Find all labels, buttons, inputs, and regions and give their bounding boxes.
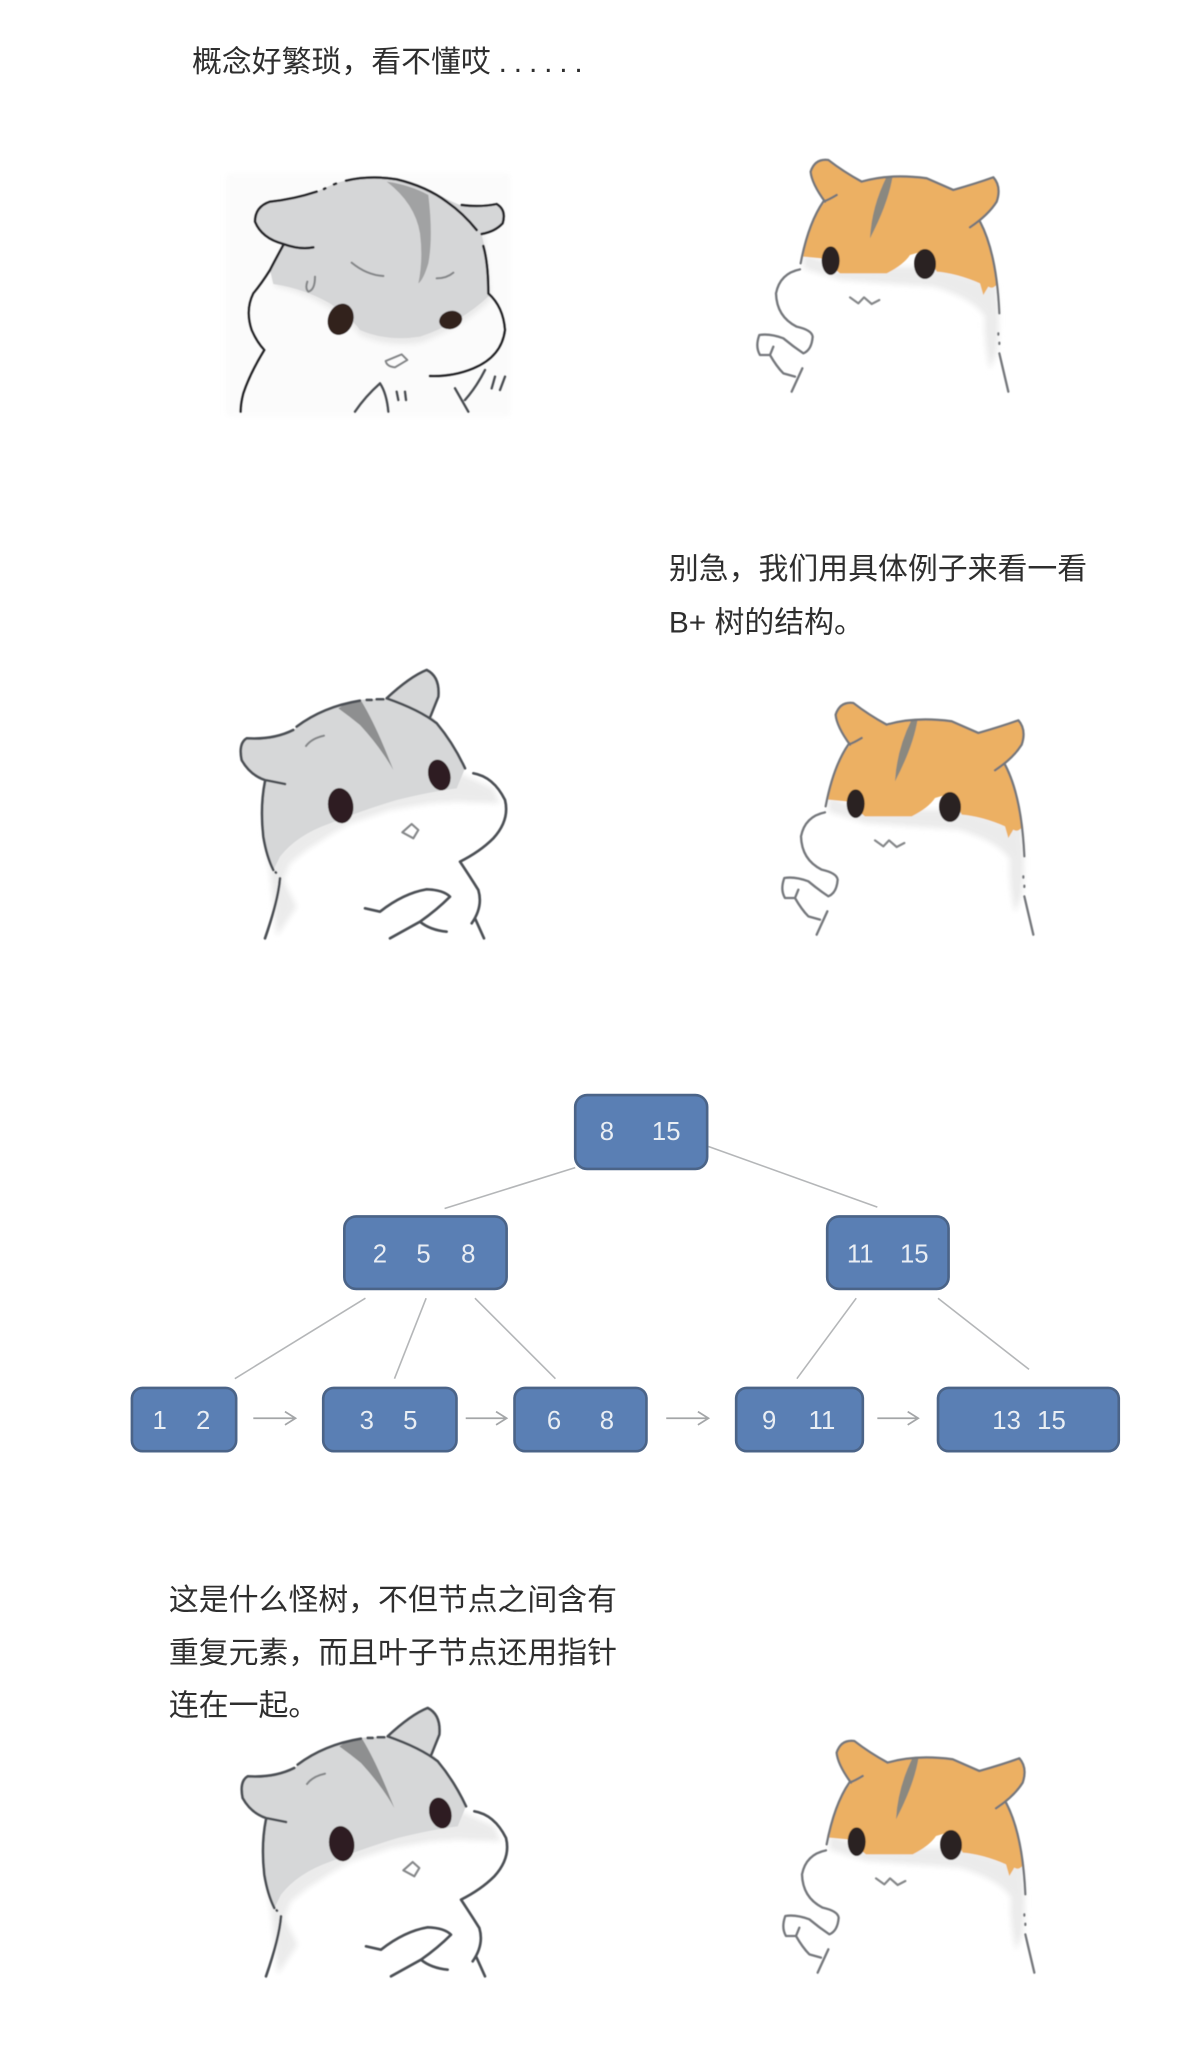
mouth xyxy=(386,354,407,367)
leaf node 6 8 xyxy=(515,1388,646,1451)
internal node 2 5 8: 2 xyxy=(373,1241,387,1269)
root node xyxy=(575,1095,707,1169)
text: explanation xyxy=(669,553,1087,640)
outline xyxy=(241,177,505,412)
internal node 2 5 8: 8 xyxy=(461,1241,476,1269)
mouth xyxy=(402,824,418,838)
hamster: gray looking up, middle xyxy=(241,670,506,938)
stripe xyxy=(387,182,431,283)
leaf node 3 5: 5 xyxy=(403,1407,417,1435)
leaf node 13 15: 15 xyxy=(1037,1407,1066,1435)
eyes xyxy=(822,246,936,279)
leaf link arrows xyxy=(253,1412,918,1425)
leaf node 9 11: 11 xyxy=(809,1407,835,1435)
eyes xyxy=(848,1827,962,1860)
hamster: orange listening, middle xyxy=(782,703,1033,935)
outline xyxy=(757,160,1008,392)
root node: 8 xyxy=(600,1118,614,1146)
leaf node 1 2 xyxy=(132,1388,236,1451)
eyes xyxy=(323,300,464,339)
outline xyxy=(241,670,506,938)
mouth xyxy=(876,1878,905,1885)
internal node 11 15: 15 xyxy=(900,1241,929,1269)
stripe xyxy=(870,176,893,238)
mouth xyxy=(850,297,879,304)
text: explanation: B+ 树的结构。 xyxy=(669,607,864,640)
outline xyxy=(783,1741,1034,1973)
root node: 15 xyxy=(652,1118,681,1146)
leaf node 13 15: 13 xyxy=(992,1407,1021,1435)
internal node 11 15 xyxy=(827,1216,949,1289)
B+ tree diagram xyxy=(132,1095,1119,1451)
leaf node 9 11: 9 xyxy=(762,1407,776,1435)
tree connector lines xyxy=(235,1146,1029,1379)
internal node 2 5 8: 5 xyxy=(416,1241,431,1269)
eyes xyxy=(326,757,454,825)
stripe xyxy=(896,1757,919,1819)
internal node 11 15: 11 xyxy=(847,1241,874,1269)
stripe xyxy=(339,1739,394,1808)
text: observation: 连在一起。 xyxy=(169,1690,318,1723)
outline xyxy=(782,703,1033,935)
eyes xyxy=(327,1795,455,1863)
text: explanation: 别急，我们用具体例子来看一看 xyxy=(669,553,1087,586)
mouth xyxy=(875,840,904,847)
hamster: orange listening, bottom xyxy=(783,1741,1034,1973)
mouth xyxy=(403,1862,419,1876)
stripe xyxy=(338,701,393,770)
paws xyxy=(355,370,505,412)
text: observation: 这是什么怪树，不但节点之间含有 xyxy=(169,1584,617,1617)
stripe xyxy=(895,719,918,781)
hamster: orange listening, top xyxy=(757,160,1008,392)
text: observation: 重复元素，而且叶子节点还用指针 xyxy=(169,1637,617,1670)
outline xyxy=(242,1708,507,1976)
eyes xyxy=(847,789,961,822)
brow xyxy=(306,736,324,746)
brow xyxy=(307,1774,325,1784)
leaf node 1 2: 2 xyxy=(196,1407,210,1435)
leaf node 1 2: 1 xyxy=(152,1407,167,1435)
hamster: gray looking up, bottom xyxy=(242,1708,507,1976)
internal node 2 5 8 xyxy=(344,1216,507,1289)
leaf node 6 8: 8 xyxy=(600,1407,614,1435)
leaf node 6 8: 6 xyxy=(547,1407,561,1435)
hamster: gray confused xyxy=(227,173,510,417)
leaf node 3 5: 3 xyxy=(360,1407,374,1435)
text: confused remark: 概念好繁琐，看不懂哎 ...... xyxy=(192,46,590,79)
leaf node 3 5 xyxy=(323,1388,456,1451)
leaf node 9 11 xyxy=(736,1388,863,1451)
brows and sweat xyxy=(306,263,453,292)
leaf node 13 15 xyxy=(938,1388,1119,1451)
text: observation xyxy=(169,1584,617,1723)
